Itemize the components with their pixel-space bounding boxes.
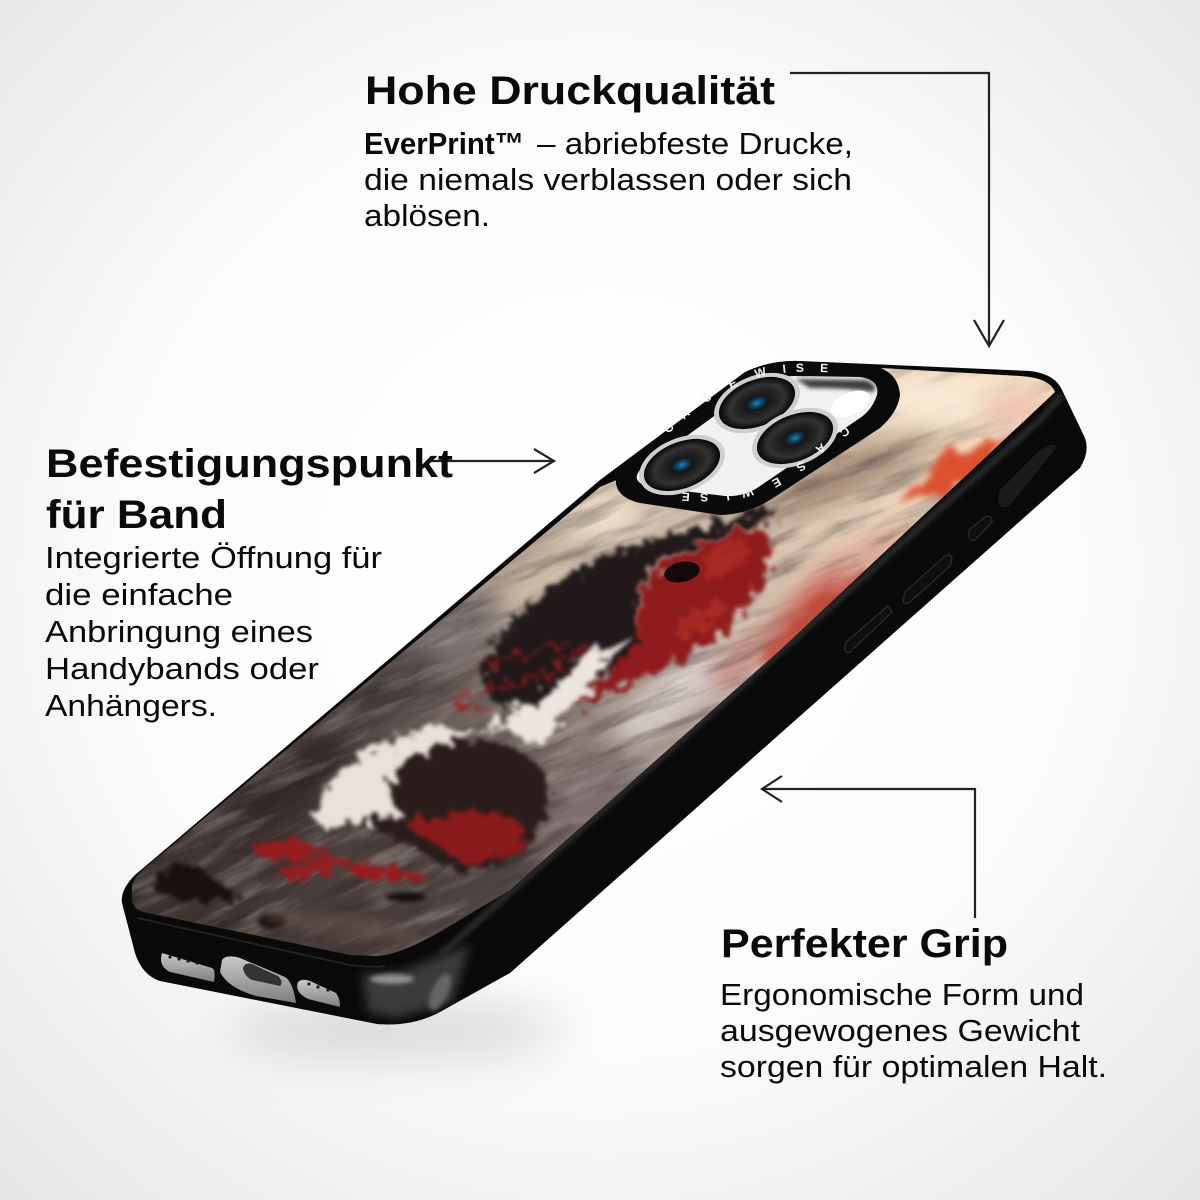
body: print quality: [364, 127, 853, 233]
ring lettering: CASEWISE: [681, 424, 852, 504]
red swirl strokes: [450, 640, 590, 708]
body: print quality: EverPrint™: [364, 127, 524, 161]
arrow: grip: [762, 776, 975, 918]
ring lettering: [661, 361, 852, 504]
body: strap attachment: Anhängers.: [45, 689, 217, 723]
bottom ports: [161, 953, 340, 1007]
dark mound: [360, 741, 552, 870]
bottom red streaks: [250, 838, 435, 880]
camera window: [637, 376, 877, 496]
dark blotches: [150, 862, 426, 929]
heading: strap attachment: [46, 442, 453, 537]
clouds and colour washes: [220, 422, 952, 894]
heading: strap attachment: für Band: [46, 493, 227, 537]
text block: strap attachment: [45, 442, 453, 723]
body: grip: [720, 978, 1107, 1084]
phone case product image: [122, 360, 1087, 1073]
red disc highlights: [674, 536, 752, 641]
text block: grip: [720, 922, 1107, 1084]
lower red wash: [750, 565, 865, 665]
body: strap attachment: [45, 541, 382, 723]
body: print quality: die niemals verblassen oder sich: [364, 163, 852, 197]
lower warm tint: [262, 909, 412, 942]
ring lettering: CASEWISE: [661, 361, 828, 436]
case body: [122, 361, 1087, 1024]
body: print quality: – abriebfeste Drucke,: [537, 127, 853, 161]
ground shadow: [225, 1004, 565, 1056]
body: grip: ausgewogenes Gewicht: [720, 1014, 1081, 1048]
brush streak texture: [132, 369, 1054, 954]
lenses: [705, 361, 809, 445]
heading: strap attachment: Befestigungspunkt: [46, 442, 453, 486]
case side highlights: [137, 395, 1062, 1018]
black dot: [664, 562, 700, 582]
red in mound: [405, 812, 526, 868]
body: print quality: ablösen.: [364, 199, 490, 233]
arrow: print quality: [790, 73, 1004, 346]
body: strap attachment: die einfache: [45, 578, 233, 612]
body: strap attachment: Integrierte Öffnung für: [45, 541, 382, 575]
side buttons: [845, 444, 1056, 652]
body: strap attachment: Anbringung eines: [45, 615, 313, 649]
white fox body: [470, 650, 612, 745]
text block: print quality: [364, 69, 853, 233]
fox ears and snout: [580, 637, 634, 660]
red yin-yang disc: [570, 528, 772, 708]
body: grip: Ergonomische Form und: [720, 978, 1084, 1012]
orange red patch: [900, 436, 1018, 503]
body: grip: sorgen für optimalen Halt.: [720, 1050, 1107, 1084]
body: strap attachment: Handybands oder: [45, 652, 319, 686]
camera bump: [616, 361, 900, 515]
printed artwork: [132, 368, 1055, 956]
heading: print quality: Hohe Druckqualität: [365, 69, 775, 113]
heading: grip: Perfekter Grip: [721, 922, 1008, 966]
white fox tail: [312, 728, 482, 826]
dark yin-yang arc: [485, 505, 775, 705]
arrow: strap attachment: [430, 449, 554, 473]
cream top and pink washes: [758, 374, 1050, 659]
